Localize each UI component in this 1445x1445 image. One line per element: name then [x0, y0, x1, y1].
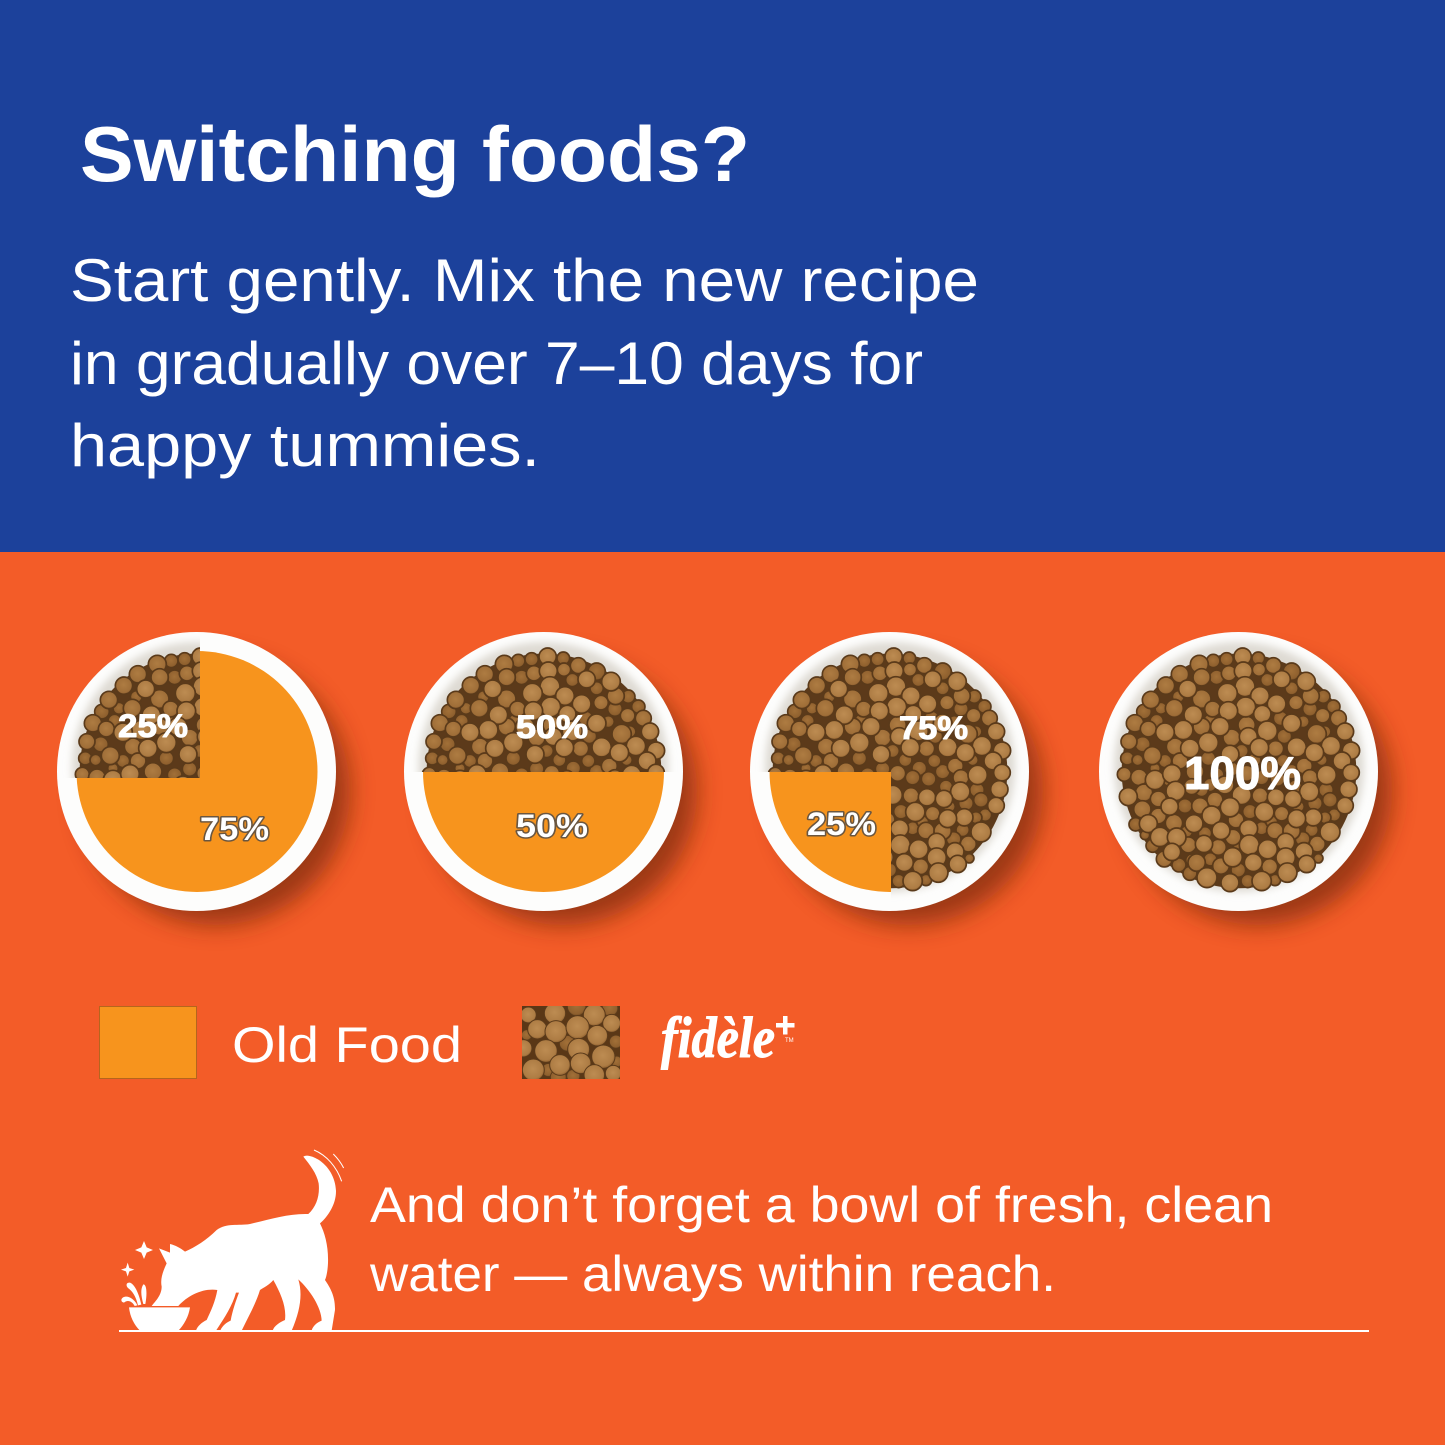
closing note text: And don’t forget a bowl of fresh, clean — [370, 1177, 1273, 1233]
logo: fidèle+: fidèle — [661, 1005, 775, 1070]
label 25%: 25% — [807, 806, 876, 842]
label 25%: 25% — [118, 708, 188, 744]
sparkle large — [135, 1241, 153, 1259]
ground line — [119, 1330, 1369, 1332]
panel: orange lower section — [57, 632, 1406, 1332]
water splash — [121, 1283, 146, 1306]
icon: dog drinking from bowl — [121, 1150, 344, 1331]
bowl: 75% old food, 25% new food — [57, 632, 350, 925]
label 50% bottom: 50% — [516, 808, 588, 844]
intro text: in gradually over 7–10 days for — [70, 330, 923, 397]
water bowl — [129, 1307, 190, 1331]
legend label: old food: Old Food — [232, 1017, 462, 1073]
panel: blue header — [0, 0, 1445, 552]
closing note text — [369, 1177, 1273, 1302]
logo: fidèle+: TM — [785, 1038, 794, 1044]
label 75%: 75% — [899, 710, 968, 746]
intro text: happy tummies. — [70, 412, 540, 479]
dog silhouette — [152, 1156, 336, 1331]
bowl: 100% new food — [1099, 632, 1392, 925]
bowl: 25% old food, 75% new food — [750, 632, 1043, 925]
legend — [99, 1006, 794, 1079]
intro text — [70, 247, 979, 479]
title: Switching foods? — [80, 110, 750, 198]
bowl: 50% old food, 50% new food — [404, 632, 697, 925]
label 75%: 75% — [200, 811, 269, 847]
legend swatch: old food — [100, 1006, 196, 1078]
sparkle small — [121, 1263, 134, 1277]
tail wag lines — [314, 1150, 344, 1181]
legend swatch: new food kibble — [522, 1006, 620, 1079]
intro text: Start gently. Mix the new recipe — [70, 247, 979, 314]
label 100%: 100% — [1184, 747, 1301, 799]
closing note text: water — always within reach. — [369, 1246, 1056, 1302]
label 50% top: 50% — [516, 709, 588, 745]
